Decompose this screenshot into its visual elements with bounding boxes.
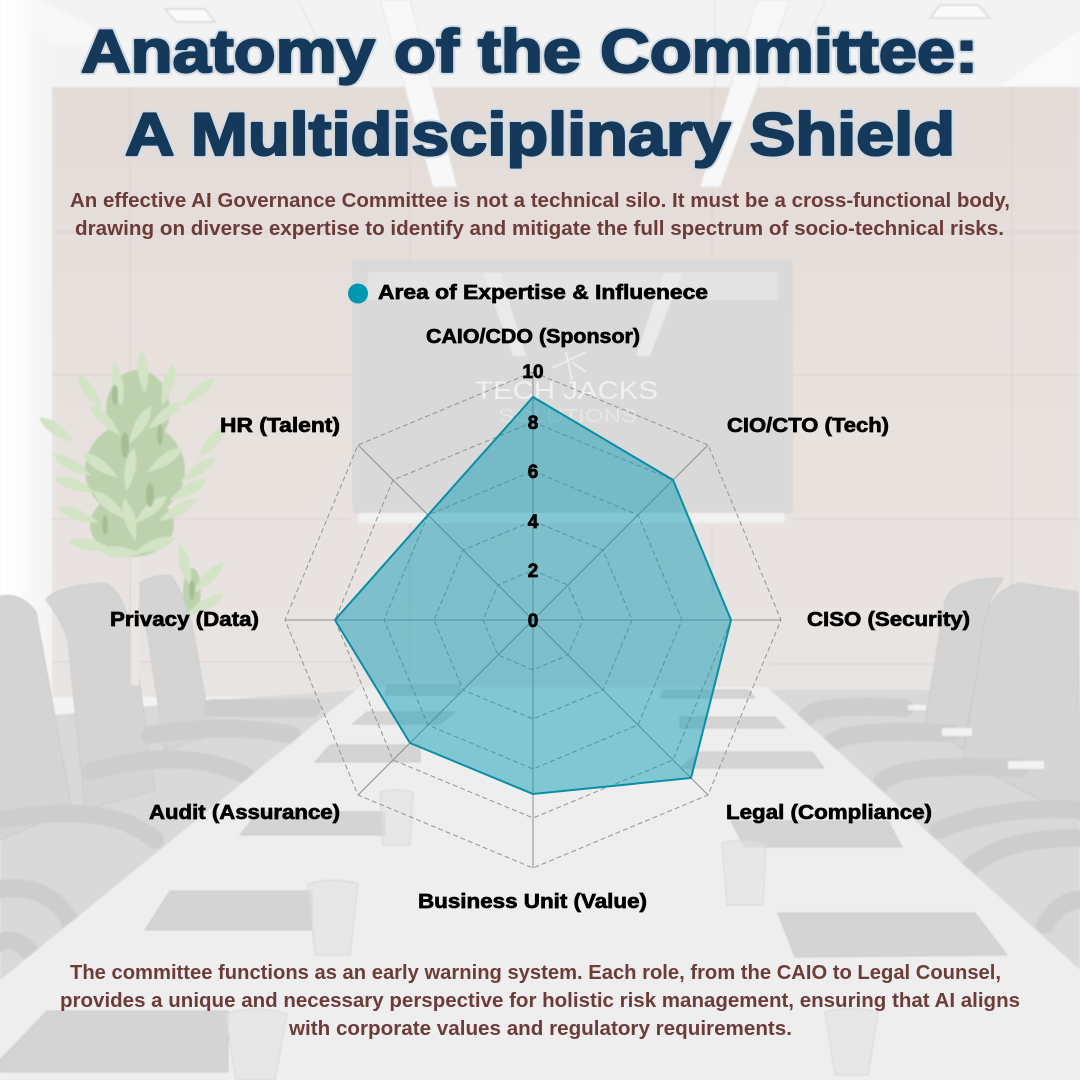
intro text: drawing on diverse expertise to identify and mitigate the full spectrum of socio-technical risks. xyxy=(75,218,1004,240)
axis labels: CISO (Security) xyxy=(807,609,970,631)
watermark logo: TECH JACKS xyxy=(475,377,658,405)
radial axis ticks: 0 xyxy=(528,611,538,632)
plant xyxy=(36,350,230,685)
notebooks xyxy=(0,685,1007,1072)
title: Anatomy of the Committee: xyxy=(81,18,978,85)
wall monitor xyxy=(352,260,793,523)
watermark logo xyxy=(475,352,658,426)
intro text xyxy=(70,190,1010,240)
radar grid xyxy=(285,372,781,868)
conference table xyxy=(0,687,1080,1080)
axis labels: CAIO/CDO (Sponsor) xyxy=(426,326,640,348)
radar chart xyxy=(110,326,970,913)
closing text: The committee functions as an early warning system. Each role, from the CAIO to Legal Counsel, xyxy=(70,962,1001,984)
title: Anatomy of the Committee: xyxy=(81,18,978,85)
title: A Multidisciplinary Shield xyxy=(125,101,955,168)
title xyxy=(81,18,978,168)
closing text xyxy=(60,962,1020,1040)
axis labels: Legal (Compliance) xyxy=(726,802,932,824)
legend: Area of Expertise & Influenece xyxy=(378,282,708,304)
axis labels: Privacy (Data) xyxy=(110,609,259,631)
radial axis ticks: 4 xyxy=(528,512,539,533)
intro text: An effective AI Governance Committee is not a technical silo. It must be a cross-functional body, xyxy=(70,190,1010,212)
radial axis ticks: 6 xyxy=(528,462,538,483)
radial axis ticks xyxy=(522,362,544,632)
axis labels: Audit (Assurance) xyxy=(149,802,340,824)
radar data polygon xyxy=(335,397,731,794)
axis labels: HR (Talent) xyxy=(220,415,340,437)
axis labels xyxy=(110,326,970,913)
radial axis ticks: 8 xyxy=(528,413,538,434)
ceiling lights xyxy=(380,0,790,356)
closing text: provides a unique and necessary perspective for holistic risk management, ensuring that AI aligns xyxy=(60,990,1020,1012)
floor and chairs right xyxy=(770,578,1080,970)
floor and chairs left xyxy=(0,575,360,985)
water glasses xyxy=(225,790,878,1080)
closing text: with corporate values and regulatory requirements. xyxy=(288,1018,792,1040)
watermark logo: SOLUTIONS xyxy=(498,406,637,426)
radial axis ticks: 10 xyxy=(522,362,544,383)
radial axis ticks: 2 xyxy=(528,561,538,582)
axis labels: Business Unit (Value) xyxy=(418,891,647,913)
title: A Multidisciplinary Shield xyxy=(125,101,955,168)
axis labels: CIO/CTO (Tech) xyxy=(727,415,889,437)
